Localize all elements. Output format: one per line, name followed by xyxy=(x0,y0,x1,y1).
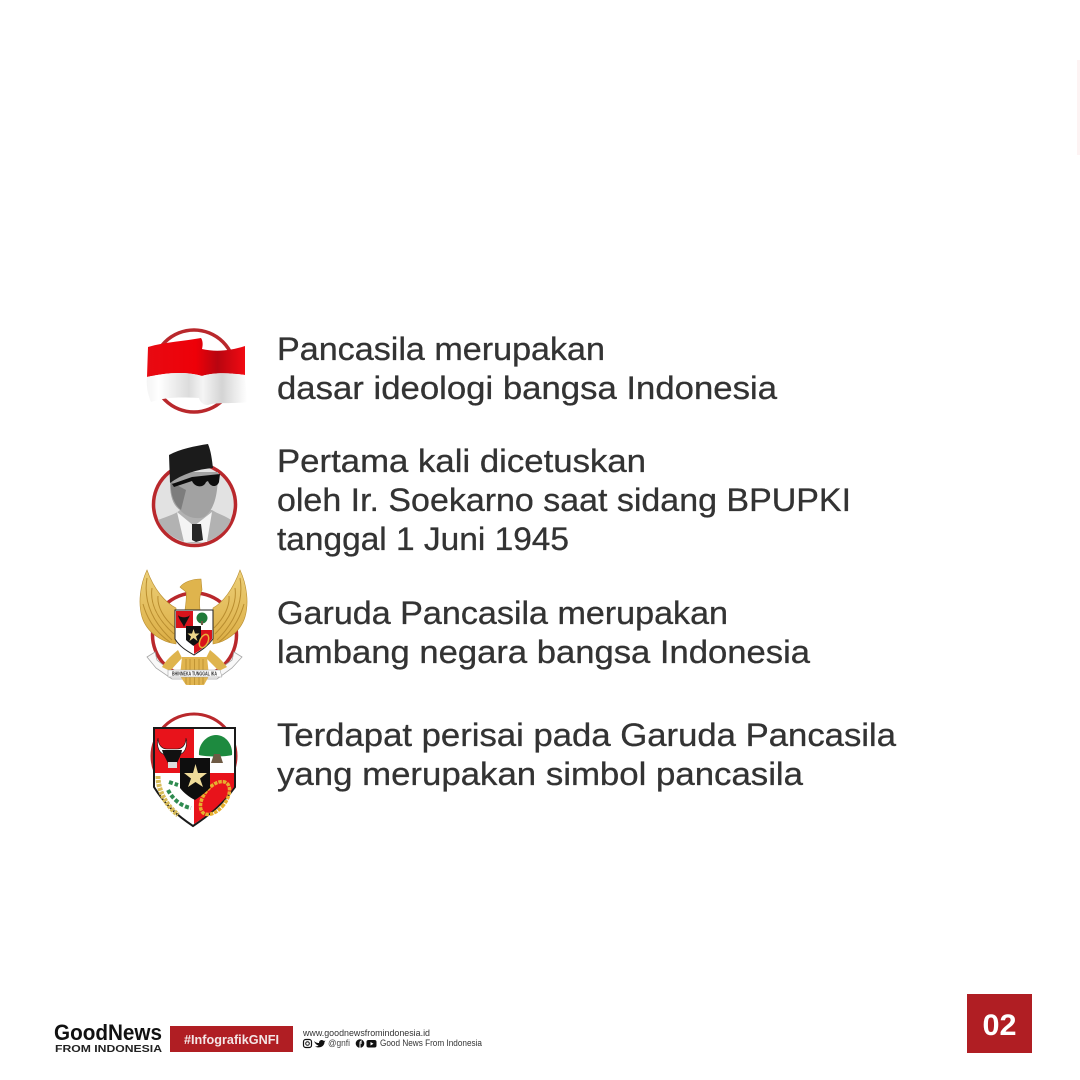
banyan tree xyxy=(199,735,232,763)
hashtag badge xyxy=(170,1026,293,1052)
icon: facebook xyxy=(356,1039,364,1048)
text block 2: tanggal 1 Juni 1945 xyxy=(277,521,569,557)
footer logo: GoodNews From Indonesia: GoodNews xyxy=(54,1020,162,1045)
text block 3 xyxy=(277,595,810,670)
face xyxy=(170,472,218,518)
handle: @gnfi xyxy=(328,1038,350,1048)
footer logo: GoodNews From Indonesia: FROM INDONESIA xyxy=(55,1043,162,1055)
icon: Pancasila shield xyxy=(152,714,236,826)
shirt collar and tie xyxy=(177,512,212,542)
hashtag badge: #InfografikGNFI xyxy=(184,1032,279,1047)
text block 3: lambang negara bangsa Indonesia xyxy=(277,634,810,670)
tail xyxy=(180,657,209,685)
text block 2: oleh Ir. Soekarno saat sidang BPUPKI xyxy=(277,482,851,518)
rice and cotton xyxy=(158,776,191,815)
icon: portrait of Ir. Soekarno xyxy=(154,444,236,546)
ribbon xyxy=(147,652,242,679)
text block 2: Pertama kali dicetuskan xyxy=(277,443,646,479)
black centre shield with star xyxy=(180,758,210,800)
text block 1: Pancasila merupakan xyxy=(277,331,605,367)
footer logo: GoodNews From Indonesia xyxy=(54,1020,162,1055)
icon: Indonesian flag in red ring xyxy=(147,330,247,412)
small shield xyxy=(175,610,213,655)
text block 1 xyxy=(277,331,777,406)
right wing xyxy=(213,570,247,644)
icon: instagram xyxy=(304,1040,312,1048)
text block 2 xyxy=(277,443,851,557)
uniform shoulders xyxy=(158,510,231,543)
page name: Good News From Indonesia xyxy=(380,1038,482,1048)
footer contact details: www.goodnewsfromindonesia.id xyxy=(302,1028,430,1039)
footer contact details xyxy=(302,1028,482,1048)
legs and feet xyxy=(162,650,227,671)
bull head xyxy=(157,738,187,768)
icon: twitter xyxy=(314,1040,326,1047)
head and neck xyxy=(180,579,202,610)
text block 1: dasar ideologi bangsa Indonesia xyxy=(277,370,777,406)
gold chain xyxy=(195,776,235,820)
sunglasses xyxy=(172,474,220,487)
icon: youtube xyxy=(366,1040,376,1048)
red quadrants xyxy=(155,729,194,773)
page number badge: 02 xyxy=(982,1009,1016,1042)
page number badge xyxy=(967,994,1032,1053)
motto text on ribbon: BHINNEKA TUNGGAL IKA xyxy=(172,672,217,678)
ribbon band xyxy=(168,670,222,677)
left wing xyxy=(140,570,176,644)
text block 4: Terdapat perisai pada Garuda Pancasila xyxy=(277,717,896,753)
text block 4: yang merupakan simbol pancasila xyxy=(277,756,803,792)
text block 4 xyxy=(277,717,896,792)
black peci cap xyxy=(169,444,213,483)
text block 3: Garuda Pancasila merupakan xyxy=(277,595,728,631)
icon: Garuda Pancasila emblem xyxy=(140,570,247,685)
